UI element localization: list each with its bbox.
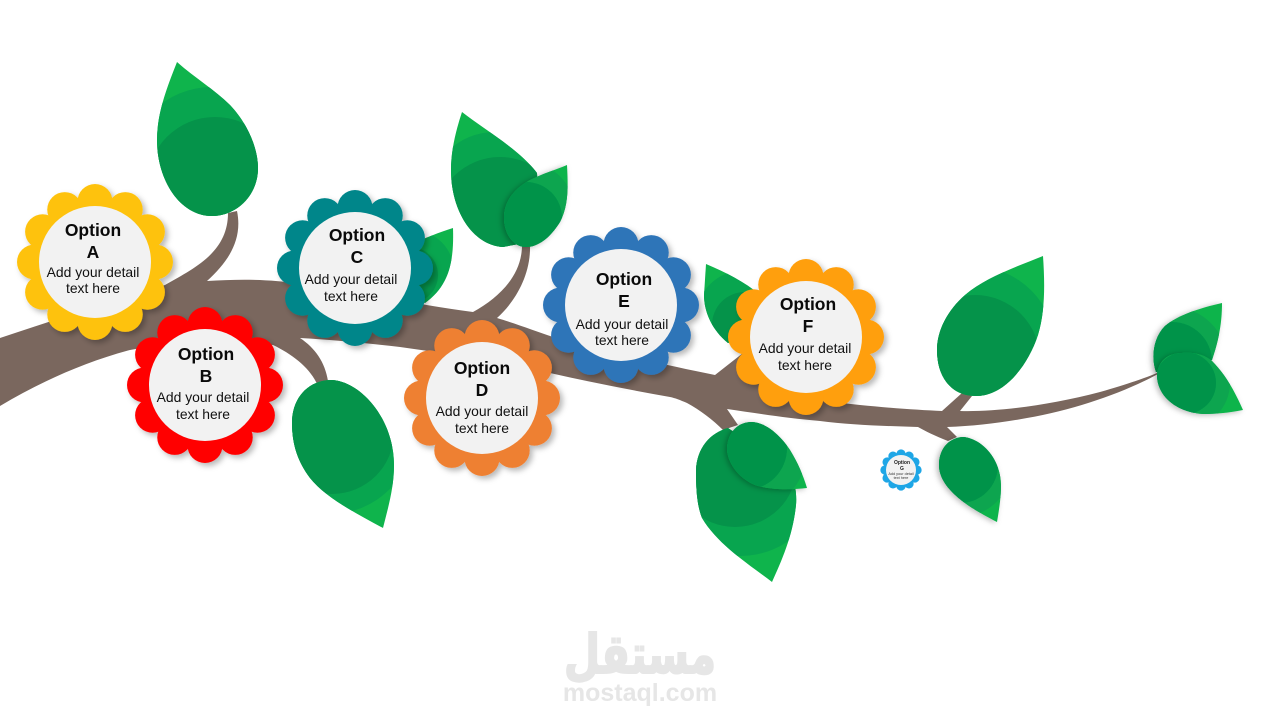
- flower: Option F: [728, 259, 884, 415]
- leaf: right upper large: [937, 256, 1044, 396]
- flower: Option D: Add your detail: [436, 403, 528, 419]
- flower: Option A: text here: [66, 280, 120, 296]
- flower: Option E: [543, 227, 699, 383]
- flower: Option D: D: [476, 380, 488, 400]
- watermark: mostaql logo: mostaql.com: [563, 679, 717, 707]
- flower: Option A: A: [87, 242, 100, 262]
- flower: Option B: [127, 307, 283, 463]
- flower: Option A: Option: [65, 220, 121, 240]
- flower: Option C: C: [351, 247, 364, 267]
- flower: Option C: text here: [324, 288, 378, 304]
- flower: Option D: text here: [455, 420, 509, 436]
- leaf: right lower small: [934, 435, 1002, 524]
- flower: Option B: Option: [178, 344, 234, 364]
- flower: Option E: E: [618, 291, 630, 311]
- flower: Option E: text here: [595, 332, 649, 348]
- flower: Option A: Add your detail: [47, 264, 139, 280]
- leaf: behind amber flower: [704, 264, 753, 343]
- leaf: bottom centre small: [722, 420, 807, 493]
- flower: Option B: B: [200, 366, 212, 386]
- flower: Option F: Option: [780, 294, 836, 314]
- flower: Option D: Option: [454, 358, 510, 378]
- flower: Option F: F: [803, 316, 814, 336]
- flower: Option B: Add your detail: [157, 389, 249, 405]
- flower: Option G small: Option: [894, 460, 910, 466]
- flower: Option C: Option: [329, 225, 385, 245]
- leaf: top centre small: [500, 164, 569, 251]
- leaf: top centre large: [451, 112, 538, 247]
- leaf: branch tip lower: [1152, 352, 1243, 418]
- watermark: mostaql logo: مستقل: [564, 623, 716, 686]
- flower: Option C: Add your detail: [305, 271, 397, 287]
- flower: Option G small: Add your detail: [888, 472, 914, 476]
- leaf: behind teal flower: [418, 228, 454, 303]
- leaf: top left: [157, 62, 258, 216]
- flower: Option D: [404, 320, 560, 476]
- flower: Option E: Add your detail: [576, 316, 668, 332]
- flower: Option A: [17, 184, 173, 340]
- leaf: bottom centre large: [696, 428, 796, 582]
- flower: Option G small: text here: [894, 476, 908, 480]
- watermark: mostaql logo: [563, 623, 717, 707]
- flower: Option F: Add your detail: [759, 340, 851, 356]
- branch: main tree limb with twigs: [0, 211, 1157, 441]
- flower: Option B: text here: [176, 406, 230, 422]
- leaf: lower left: [292, 380, 394, 528]
- flower: Option G small: [880, 449, 922, 491]
- flower: Option G small: G: [900, 466, 904, 472]
- flower: Option F: text here: [778, 357, 832, 373]
- flower: Option C: [277, 190, 433, 346]
- flower: Option E: Option: [596, 269, 652, 289]
- leaf: branch tip upper: [1148, 302, 1223, 375]
